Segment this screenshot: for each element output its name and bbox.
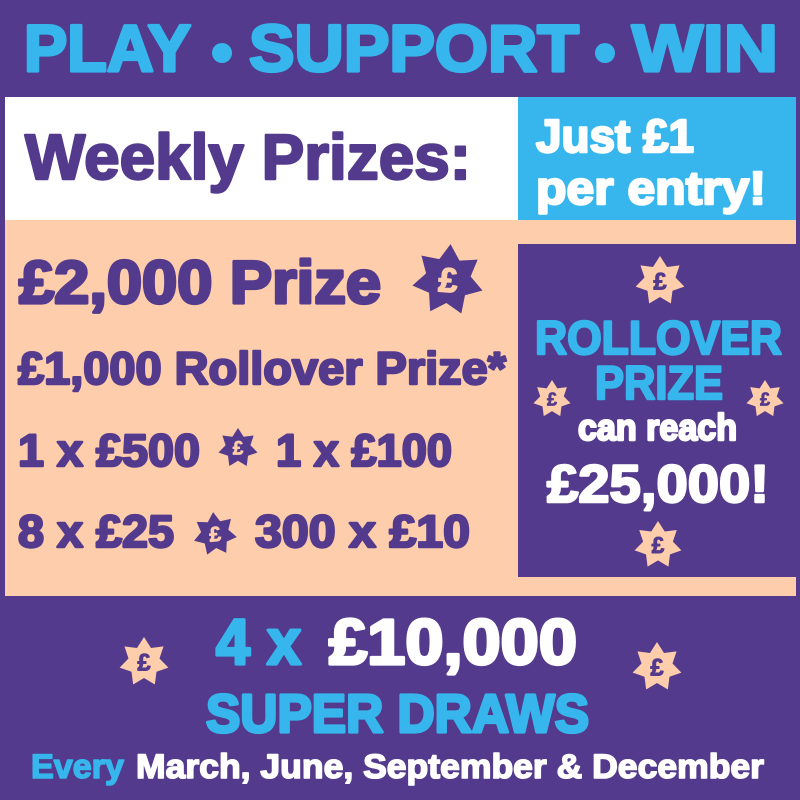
text: £25,000: £25,000! xyxy=(547,455,769,514)
icon: star bottom xyxy=(635,521,681,567)
prize: £2,000: £2,000 Prize xyxy=(19,249,381,316)
title: WIN xyxy=(632,11,778,85)
text: every: Every xyxy=(31,748,124,786)
prize: 1 x £100: 1 x £100 xyxy=(276,425,452,476)
panel: weekly prizes heading xyxy=(5,97,518,220)
prize: 1 x £500: 1 x £500 xyxy=(18,425,200,476)
title: SUPPORT xyxy=(249,11,579,85)
heading: prize: PRIZE xyxy=(595,356,723,409)
panel: rollover prize xyxy=(518,244,800,577)
text: 4 x: 4 x xyxy=(216,606,301,678)
icon: star left xyxy=(533,380,571,416)
panel: prize list xyxy=(5,220,796,596)
icon: star small xyxy=(192,510,238,556)
text: £10,000: £10,000 xyxy=(329,606,577,678)
icon: star large xyxy=(411,242,486,315)
heading: rollover: ROLLOVER xyxy=(535,311,782,364)
icon: star small xyxy=(218,428,258,466)
icon: star bottom left xyxy=(120,637,168,685)
icon: star bottom right xyxy=(633,642,681,690)
panel: price per entry xyxy=(518,97,796,220)
heading: super draws: SUPER DRAWS xyxy=(206,684,589,744)
text: per entry: per entry! xyxy=(536,162,766,214)
title xyxy=(24,11,778,85)
prize: 8 x £25: 8 x £25 xyxy=(18,506,174,557)
title: PLAY xyxy=(24,11,191,85)
icon: star top xyxy=(636,256,684,304)
prize: £1,000 rollover: £1,000 Rollover Prize* xyxy=(18,343,506,394)
text: just £1: Just £1 xyxy=(536,110,694,162)
heading: weekly prizes: Weekly Prizes: xyxy=(25,121,471,193)
text: can reach: can reach xyxy=(578,407,737,448)
prize: 300 x £10: 300 x £10 xyxy=(255,506,470,557)
text: months: March, June, September & December xyxy=(136,748,764,786)
icon: star right xyxy=(746,380,784,416)
